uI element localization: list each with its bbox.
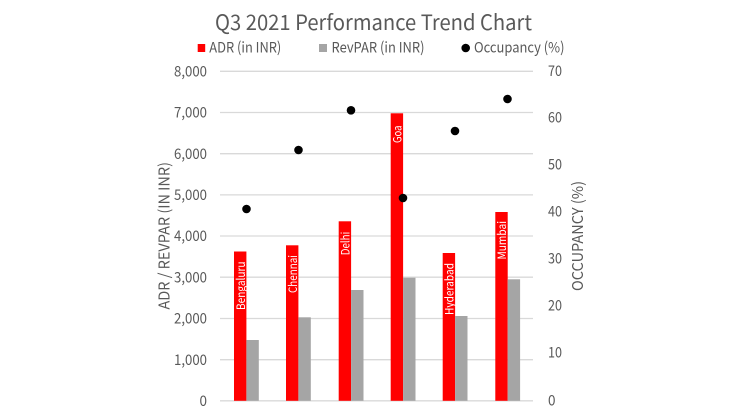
bars: Chennai: Chennai [285,255,301,293]
bars: Hyderabad [441,253,468,401]
right axis labels: 50 [548,154,562,174]
legend: ADR (in INR) [209,36,281,58]
left axis title: ADR / REVPAR (IN INR) [154,162,175,310]
left axis labels: 2,000 [174,308,207,329]
bars: Goa: Goa [389,126,405,143]
bars: Goa [389,113,416,401]
bars: Bengaluru: Bengaluru [233,262,249,310]
bars: Bengaluru [233,252,259,401]
occupancy dots [242,95,512,213]
right axis labels: 10 [548,342,562,362]
bars: Mumbai: Mumbai [494,221,510,260]
left axis labels: 7,000 [174,102,207,123]
right axis labels: 40 [548,200,562,222]
bars: Delhi [338,221,364,401]
bars: Chennai [285,245,311,401]
legend: Occupancy (%) [474,36,564,58]
title: Q3 2021 Performance Trend Chart [215,7,532,37]
left axis labels: 1,000 [174,349,207,370]
bars: Mumbai [494,212,520,401]
left axis labels: 5,000 [174,184,207,205]
left axis labels: 8,000 [174,60,207,82]
left axis labels [174,60,207,411]
right axis labels: 30 [548,248,562,268]
bars: Delhi: Delhi [338,232,354,255]
legend: RevPAR (in INR) [332,36,424,58]
left axis labels: 3,000 [174,266,207,287]
left axis labels: 6,000 [174,143,207,164]
right axis labels: 20 [548,294,562,316]
right axis labels: 60 [548,106,562,128]
right axis labels: 0 [548,390,556,410]
right axis labels: 70 [548,60,562,81]
left axis labels: 0 [200,390,207,411]
bars: Hyderabad: Hyderabad [441,263,457,315]
right axis labels [548,60,562,410]
left axis labels: 4,000 [174,225,207,246]
legend [198,36,564,58]
right axis title: OCCUPANCY (%) [567,181,588,291]
